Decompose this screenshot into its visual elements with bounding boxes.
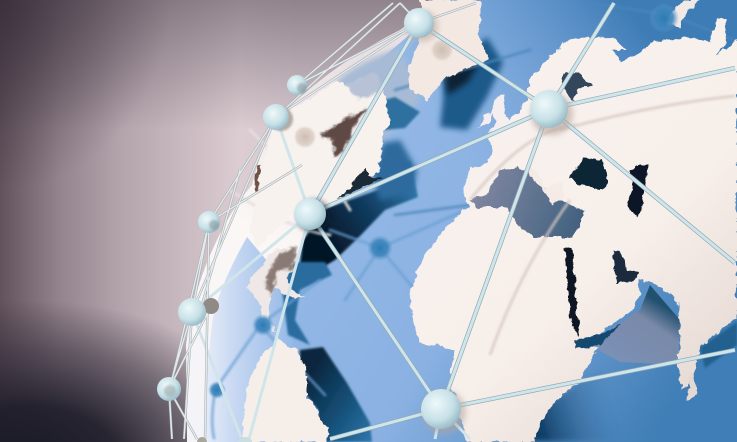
sea: Hudson Bay dark <box>338 168 382 200</box>
network connecting rods <box>169 3 735 439</box>
continent: Africa and Eurasia <box>410 18 737 442</box>
node: upper rim <box>263 104 293 131</box>
detail: Alaska brown <box>254 164 261 192</box>
sea: Baltic <box>562 73 593 100</box>
detail: Sri Lanka <box>688 372 696 401</box>
continent: Scandinavia tip north <box>666 0 700 26</box>
continent: Central America <box>247 248 306 333</box>
continents <box>242 0 737 442</box>
shadow: South America <box>300 347 372 442</box>
shadow: North America <box>298 160 418 282</box>
shadow: Arctic islands <box>367 97 420 130</box>
node: Europe hub <box>530 90 573 135</box>
shadow: Central America <box>282 262 332 345</box>
network nodes <box>157 8 573 442</box>
sea: Caspian <box>627 162 648 217</box>
ocean shadows cast by continents <box>282 37 737 442</box>
node: upper rim small <box>287 75 307 95</box>
node: top <box>404 8 438 42</box>
node: rim left <box>198 211 220 233</box>
land: Italy and Balkans <box>528 162 565 205</box>
blurred globe grid lines <box>212 3 735 438</box>
sea: Gulf of Aden <box>574 325 620 349</box>
node: Africa hub <box>421 389 466 434</box>
sea: Red Sea <box>565 247 579 337</box>
shadow: Greenland <box>440 37 503 130</box>
sea: Black Sea <box>570 158 608 190</box>
globe sphere <box>186 0 737 442</box>
detail: Mexico shading <box>265 248 295 295</box>
node: Atlantic hub <box>294 198 330 232</box>
node: bottom edge <box>238 437 252 442</box>
detail: upper ice shading <box>345 72 385 100</box>
sea: Persian Gulf <box>613 250 637 283</box>
shadow: Indian Ocean shelf <box>597 285 680 365</box>
node: rim lower <box>178 298 206 326</box>
shadow: Asia south <box>700 322 737 368</box>
blurred nodes on globe surface <box>208 3 735 399</box>
continent: North America <box>250 80 390 250</box>
continent: South America <box>242 340 328 442</box>
node: rear small <box>203 298 219 314</box>
continent: Britain <box>490 94 510 135</box>
shadow: North America upper <box>372 140 417 200</box>
shadow: Greenland core <box>445 58 480 95</box>
node: bottom edge small <box>197 437 207 442</box>
sea: Mediterranean <box>468 167 585 237</box>
continent: Greenland <box>408 0 490 100</box>
shadow: Africa east <box>525 360 640 442</box>
sea: Hudson shading <box>320 108 370 158</box>
continent: Ireland <box>479 112 493 128</box>
node: rim bottom <box>157 377 181 401</box>
